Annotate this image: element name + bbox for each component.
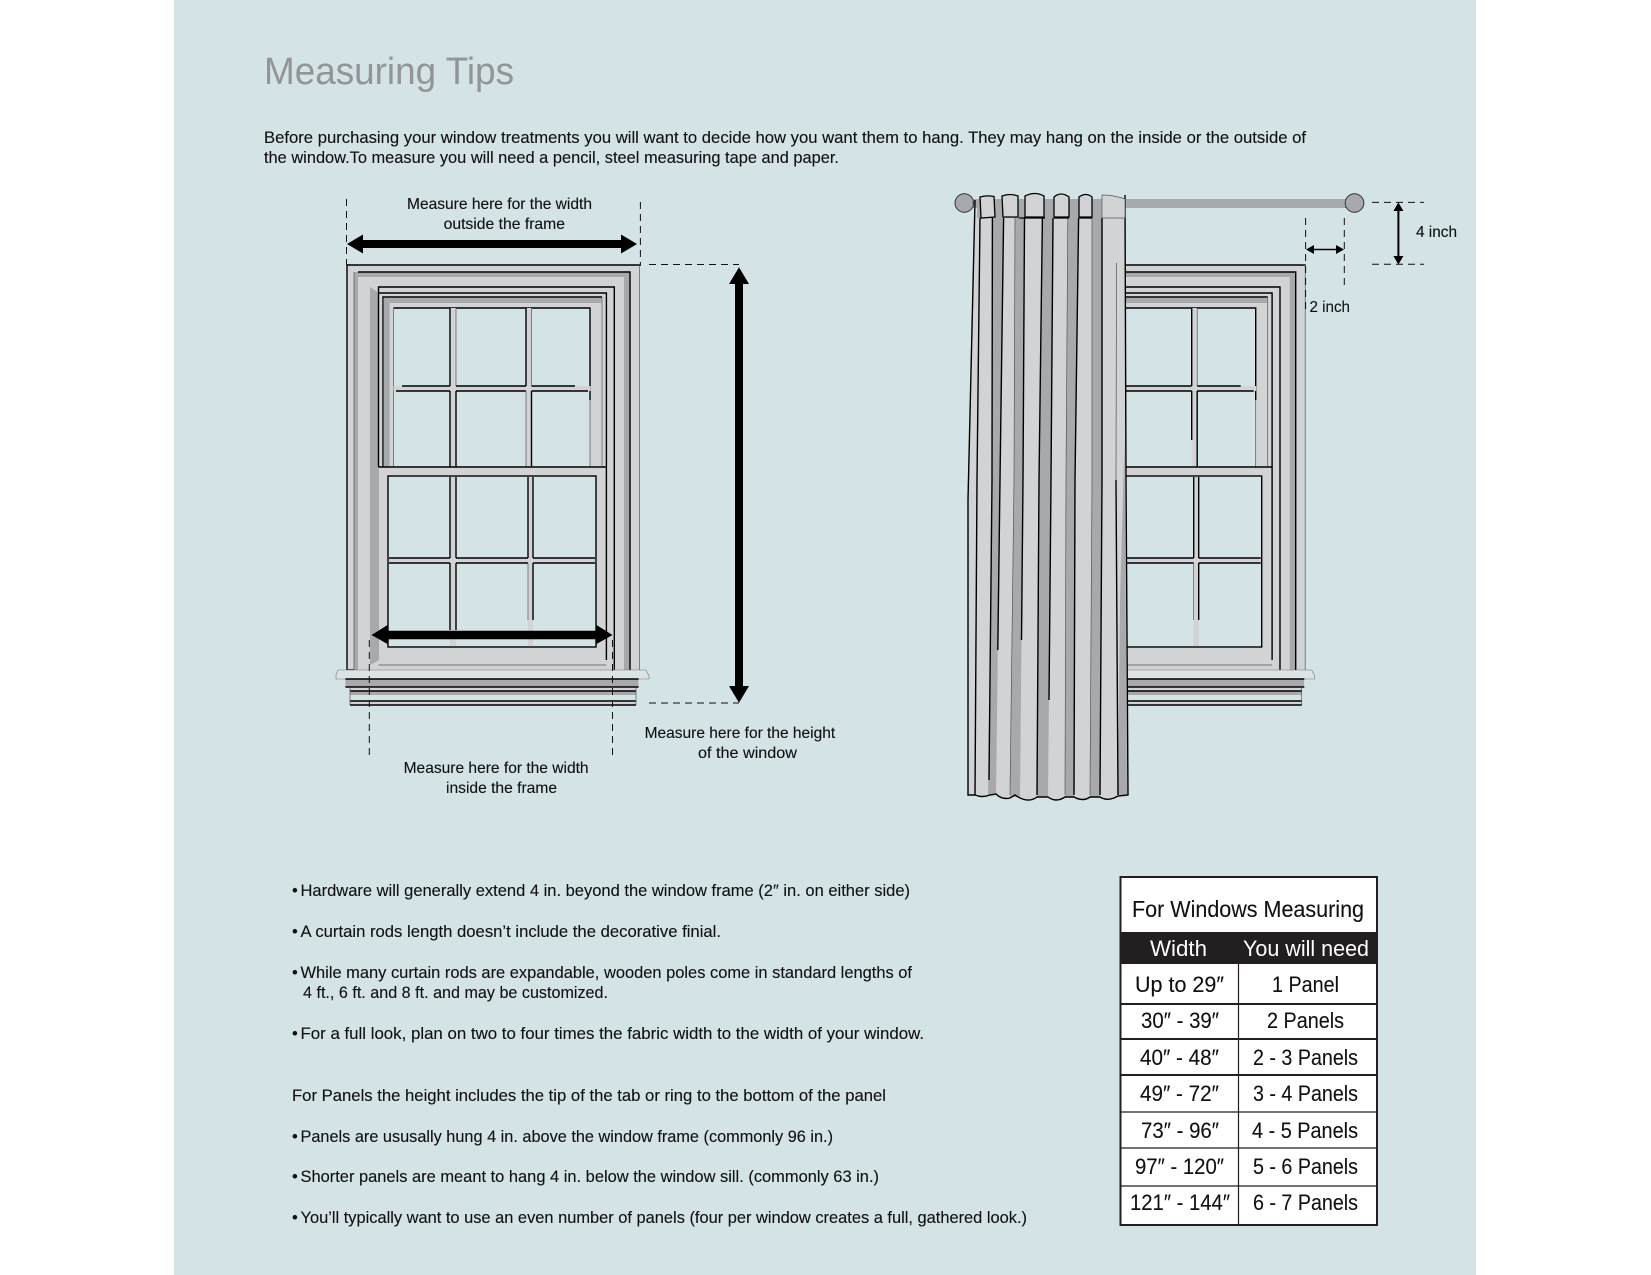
table rows: 97″ - 120″ bbox=[1135, 1154, 1224, 1179]
arrow: outside width bbox=[347, 234, 637, 254]
table rows: 1 Panel bbox=[1272, 972, 1339, 997]
title: Measuring Tips bbox=[264, 51, 514, 93]
tips list: • bbox=[292, 882, 298, 900]
table: panels needed by window width bbox=[1120, 877, 1377, 1225]
window illustration bbox=[336, 265, 649, 705]
tips list: • bbox=[292, 923, 298, 941]
table header: Width bbox=[1150, 936, 1207, 961]
table rows: 49″ - 72″ bbox=[1140, 1081, 1219, 1106]
table title: For Windows Measuring bbox=[1132, 896, 1364, 922]
table rows bbox=[1130, 972, 1358, 1215]
panel tips list: You’ll typically want to use an even number of panels (four per window creates a full, gathered look.) bbox=[300, 1209, 1027, 1227]
table rows: 30″ - 39″ bbox=[1141, 1008, 1219, 1033]
panel tips list: Panels are ususally hung 4 in. above the window frame (commonly 96 in.) bbox=[300, 1128, 833, 1146]
table rows: 40″ - 48″ bbox=[1140, 1045, 1219, 1070]
panel tips list bbox=[292, 1087, 1027, 1227]
tips list: • bbox=[292, 1025, 298, 1043]
label: inside width bbox=[404, 760, 589, 797]
curtain panel bbox=[968, 194, 1128, 800]
label: height bbox=[645, 725, 836, 762]
label: 2 inch: 2 inch bbox=[1310, 299, 1350, 316]
intro text: the window.To measure you will need a pencil, steel measuring tape and paper. bbox=[264, 149, 839, 167]
intro text: Before purchasing your window treatments you will want to decide how you want them to hang. They may hang on the inside or the outside of bbox=[264, 129, 1306, 147]
curtain rod with finials bbox=[955, 194, 1364, 212]
table rows: 121″ - 144″ bbox=[1130, 1190, 1230, 1215]
window behind curtain bbox=[1002, 265, 1315, 705]
tips list bbox=[292, 882, 924, 1043]
diagram: window measuring bbox=[336, 196, 836, 797]
panel tips list: For Panels the height includes the tip of the tab or ring to the bottom of the panel bbox=[292, 1087, 886, 1105]
intro text bbox=[264, 129, 1306, 167]
panel tips list: Shorter panels are meant to hang 4 in. below the window sill. (commonly 63 in.) bbox=[300, 1168, 879, 1186]
arrow: 4 inch bbox=[1393, 202, 1403, 264]
table rows: 5 - 6 Panels bbox=[1253, 1154, 1358, 1179]
label: height: Measure here for the height bbox=[645, 725, 836, 742]
label: inside width: inside the frame bbox=[446, 780, 557, 797]
table rows: 2 Panels bbox=[1267, 1008, 1344, 1033]
arrow: window height bbox=[729, 267, 749, 703]
tips list: • bbox=[292, 964, 298, 982]
table rows: 3 - 4 Panels bbox=[1253, 1081, 1358, 1106]
panel tips list: • bbox=[292, 1168, 298, 1186]
table rows: Up to 29″ bbox=[1135, 972, 1224, 997]
tips list: While many curtain rods are expandable, wooden poles come in standard lengths of bbox=[300, 964, 912, 982]
panel tips list: • bbox=[292, 1128, 298, 1146]
table rows: 4 - 5 Panels bbox=[1252, 1118, 1358, 1143]
table header bbox=[1121, 932, 1377, 964]
dashed guides bbox=[1306, 202, 1424, 310]
tips list: For a full look, plan on two to four times the fabric width to the width of your window. bbox=[300, 1025, 924, 1043]
tips list: 4 ft., 6 ft. and 8 ft. and may be customized. bbox=[303, 984, 608, 1002]
tips list: Hardware will generally extend 4 in. beyond the window frame (2″ in. on either side) bbox=[300, 882, 910, 900]
table grid bbox=[1121, 964, 1377, 1225]
label: inside width: Measure here for the width bbox=[404, 760, 589, 777]
diagram: curtain placement bbox=[955, 194, 1457, 800]
label: outside width bbox=[407, 196, 592, 233]
background panel bbox=[174, 0, 1476, 1275]
curtain tabs bbox=[980, 194, 1125, 218]
table rows: 73″ - 96″ bbox=[1141, 1118, 1219, 1143]
table rows: 2 - 3 Panels bbox=[1253, 1045, 1358, 1070]
window sill bbox=[336, 670, 649, 705]
table header: You will need bbox=[1243, 936, 1369, 961]
label: 4 inch: 4 inch bbox=[1416, 224, 1457, 241]
label: outside width: outside the frame bbox=[444, 216, 565, 233]
dashed guides bbox=[346, 199, 739, 758]
tips list: A curtain rods length doesn’t include the decorative finial. bbox=[300, 923, 721, 941]
label: height: of the window bbox=[698, 745, 797, 762]
arrow: inside width bbox=[372, 625, 612, 644]
panel tips list: • bbox=[292, 1209, 298, 1227]
table rows: 6 - 7 Panels bbox=[1253, 1190, 1358, 1215]
arrow: 2 inch bbox=[1306, 245, 1344, 254]
label: outside width: Measure here for the width bbox=[407, 196, 592, 213]
